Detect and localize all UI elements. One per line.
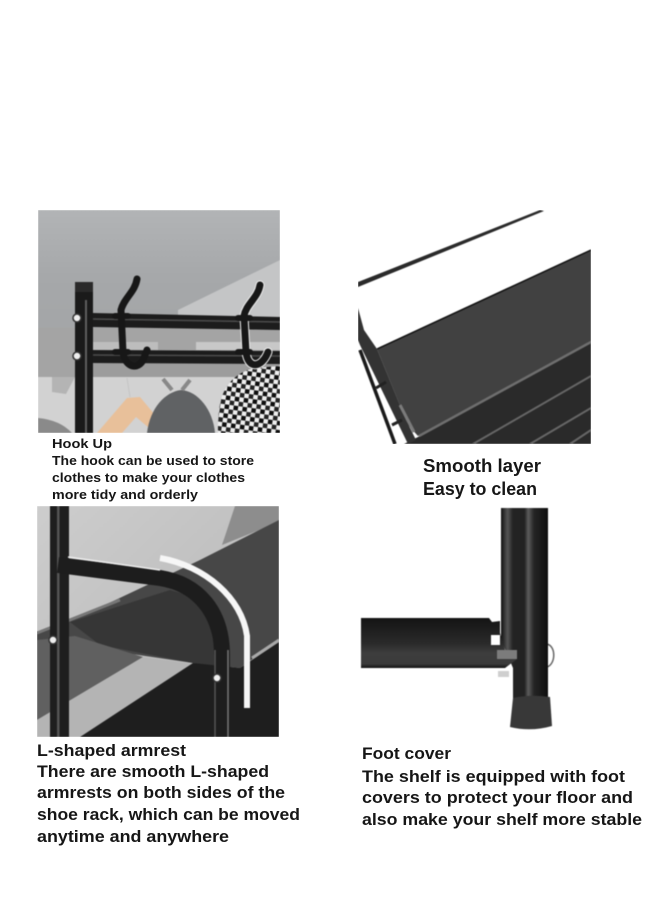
lower left gray	[37, 636, 143, 720]
horizontal tube	[361, 618, 517, 668]
panel: L-shaped armrest photo	[37, 506, 279, 737]
light band	[37, 657, 193, 737]
caption: foot cover: covers to protect your floor and	[362, 788, 633, 807]
panel: foot cover photo	[361, 508, 554, 729]
lower shelf fronts	[404, 341, 591, 444]
vertical post	[501, 508, 548, 698]
hanger	[97, 396, 154, 433]
hook left	[115, 279, 147, 366]
upper shelf	[37, 520, 279, 668]
caption: hook up: The hook can be used to store	[52, 453, 254, 468]
armrest	[58, 557, 247, 737]
infographic canvas	[37, 210, 642, 846]
underside of shelf	[70, 590, 218, 668]
side clip	[547, 644, 554, 667]
caption: hook up: Hook Up	[52, 436, 112, 451]
top right highlight	[222, 506, 279, 545]
caption: L-shaped armrest: shoe rack, which can be moved	[37, 805, 300, 824]
caption: L-shaped armrest: There are smooth L-shaped	[37, 762, 269, 781]
caption: smooth layer: Easy to clean	[423, 479, 537, 499]
caption: hook up: more tidy and orderly	[52, 487, 199, 502]
caption: L-shaped armrest: L-shaped armrest	[37, 741, 186, 760]
caption: hook up	[52, 436, 254, 502]
caption: smooth layer	[423, 456, 541, 499]
cap: checkered	[218, 366, 280, 433]
hook right	[238, 285, 268, 365]
caption: foot cover	[362, 744, 642, 829]
post	[50, 506, 69, 737]
caption: foot cover: The shelf is equipped with foot	[362, 767, 625, 786]
top rail	[358, 210, 544, 287]
caption: hook up: clothes to make your clothes	[52, 470, 245, 485]
rack post	[75, 282, 93, 433]
caption: smooth layer: Smooth layer	[423, 456, 541, 476]
caption: L-shaped armrest: armrests on both sides of the	[37, 783, 285, 802]
panel: smooth layer photo	[358, 210, 591, 444]
panel: hook up photo	[38, 210, 280, 433]
lower shelf	[80, 642, 279, 737]
screws	[73, 314, 81, 322]
caption: foot cover: Foot cover	[362, 744, 451, 763]
foot cap	[510, 696, 552, 729]
rails	[93, 313, 280, 330]
side frame	[358, 308, 416, 444]
caption: L-shaped armrest	[37, 741, 300, 846]
shelf top surface	[377, 250, 591, 436]
screws	[49, 636, 57, 644]
caption: foot cover: also make your shelf more stable	[362, 810, 642, 829]
caption: L-shaped armrest: anytime and anywhere	[37, 827, 229, 846]
cap: gray	[147, 379, 215, 433]
